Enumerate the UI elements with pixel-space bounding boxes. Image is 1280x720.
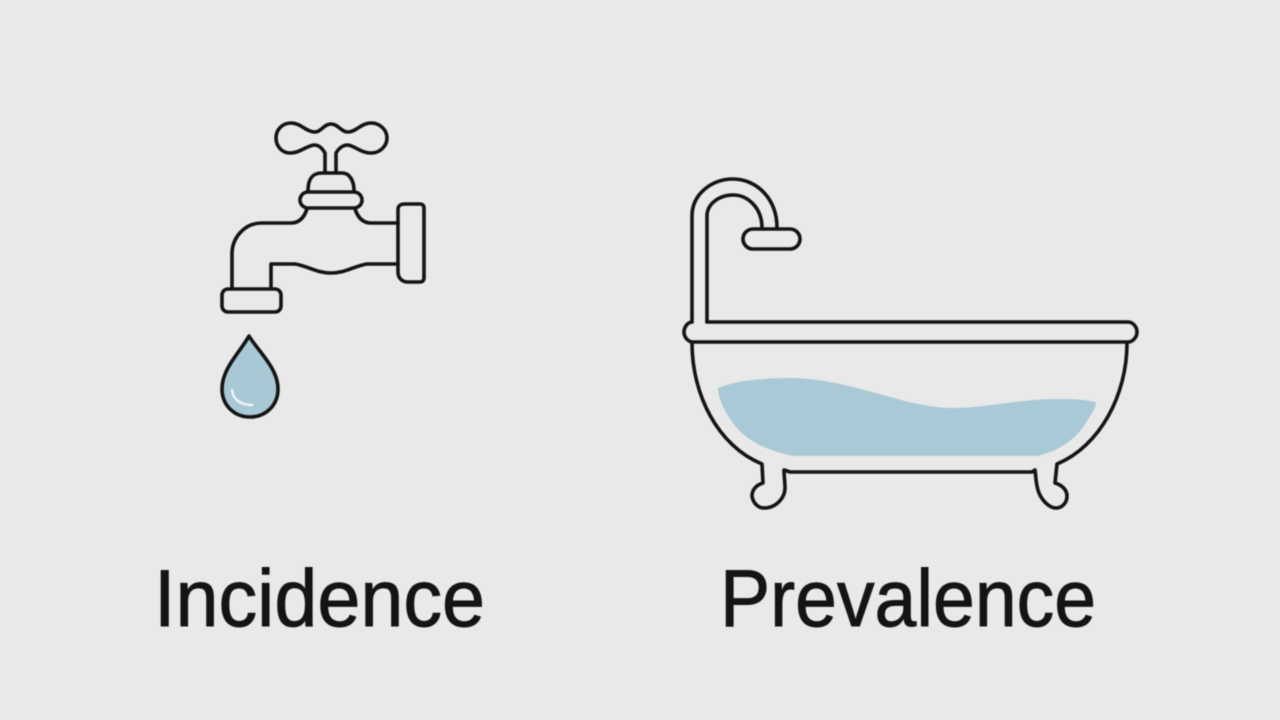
heading: Prevalence: Prevalence	[720, 554, 1096, 644]
icon: bathtub	[684, 179, 1137, 508]
tap handle	[276, 123, 387, 172]
tap bonnet	[308, 173, 354, 191]
heading: Incidence: Incidence	[154, 554, 485, 644]
tub body and feet	[692, 343, 1127, 508]
tap body	[232, 209, 398, 288]
tap flange	[398, 204, 424, 282]
drop highlight	[232, 390, 252, 405]
bath water	[718, 378, 1096, 456]
tub rim	[684, 322, 1137, 342]
tap collar	[300, 192, 362, 208]
icon: dripping tap	[222, 123, 424, 417]
shower head	[743, 229, 800, 249]
tap nozzle	[222, 289, 281, 312]
shower pipe	[692, 179, 777, 322]
water drop	[222, 336, 278, 417]
